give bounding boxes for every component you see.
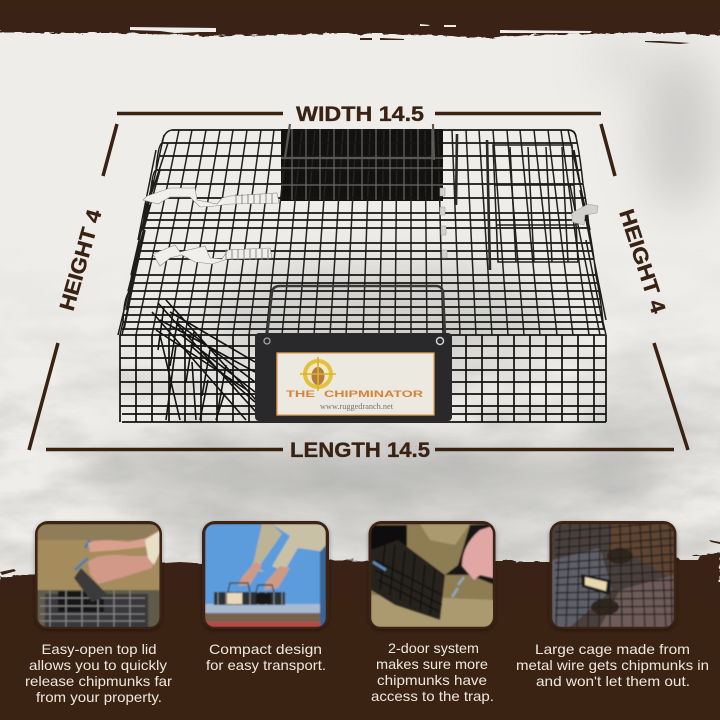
feature 2: compact design bbox=[202, 521, 329, 673]
background: grunge concrete texture bbox=[0, 32, 720, 577]
dimension: length: LENGTH 14.5 bbox=[290, 439, 430, 462]
caption: makes sure more bbox=[376, 656, 488, 672]
name plate: brand name middle: CHIPMINATOR bbox=[324, 389, 424, 399]
cage: lid end bars bbox=[281, 124, 434, 160]
caption: from your property. bbox=[36, 689, 162, 705]
cage: front name plate bbox=[255, 333, 452, 421]
dimension: right height bbox=[601, 124, 688, 450]
feature 4: large metal cage bbox=[516, 521, 709, 689]
dimension: left height: HEIGHT 4 bbox=[56, 207, 107, 313]
feature 1: easy-open lid bbox=[25, 521, 172, 705]
cage: right side latch and clips bbox=[440, 188, 598, 258]
dimension: width: WIDTH 14.5 bbox=[296, 103, 424, 126]
bottom torn brown panel bbox=[0, 540, 720, 720]
top torn brown band bbox=[0, 0, 720, 44]
caption: metal wire gets chipmunks in bbox=[516, 657, 709, 673]
caption: release chipmunks far bbox=[25, 673, 172, 689]
caption bbox=[25, 641, 172, 705]
caption: 2-door system bbox=[388, 640, 479, 656]
name plate: website: www.ruggedranch.net bbox=[320, 401, 394, 411]
caption: Compact design bbox=[209, 641, 322, 657]
cage: black lid box bbox=[281, 129, 443, 201]
photo: carrying trap bbox=[202, 521, 329, 629]
cage: carry handle bbox=[267, 286, 445, 335]
cage: rounded left edge bbox=[118, 130, 172, 335]
caption: access to the trap. bbox=[371, 688, 494, 704]
caption bbox=[516, 641, 709, 689]
name plate: brand name: THE bbox=[286, 389, 315, 399]
cage: angled door ramp bbox=[152, 300, 256, 420]
caption: Large cage made from bbox=[535, 641, 690, 657]
photo: hands opening lid bbox=[35, 521, 162, 629]
caption: for easy transport. bbox=[206, 657, 326, 673]
cage: interior partition bar bbox=[456, 134, 490, 270]
cage: left door latch springs bbox=[143, 188, 279, 266]
dimension: left height bbox=[29, 124, 117, 450]
cage: front face wires bbox=[120, 335, 606, 422]
feature 3: 2-door system bbox=[368, 521, 496, 704]
caption bbox=[371, 640, 494, 704]
caption: and won't let them out. bbox=[536, 673, 690, 689]
name plate: label card bbox=[277, 353, 434, 415]
photo: chipmunks in cage bbox=[550, 521, 676, 629]
cage: top face horizontal wires bbox=[120, 130, 605, 335]
wire cage trap bbox=[118, 124, 606, 422]
caption: allows you to quickly bbox=[29, 657, 167, 673]
caption: Easy-open top lid bbox=[42, 641, 156, 657]
cage: lid wires bbox=[281, 129, 443, 200]
name plate: target logo bbox=[300, 357, 336, 391]
cage: rounded right edge bbox=[568, 130, 606, 335]
photo: hand at trap door bbox=[368, 521, 496, 629]
dimension: right height: HEIGHT 4 bbox=[614, 206, 670, 317]
caption: chipmunks have bbox=[377, 672, 487, 688]
cage: top face vertical wires bbox=[136, 130, 589, 335]
cage: interior door frame bbox=[493, 145, 578, 262]
caption bbox=[206, 641, 326, 673]
